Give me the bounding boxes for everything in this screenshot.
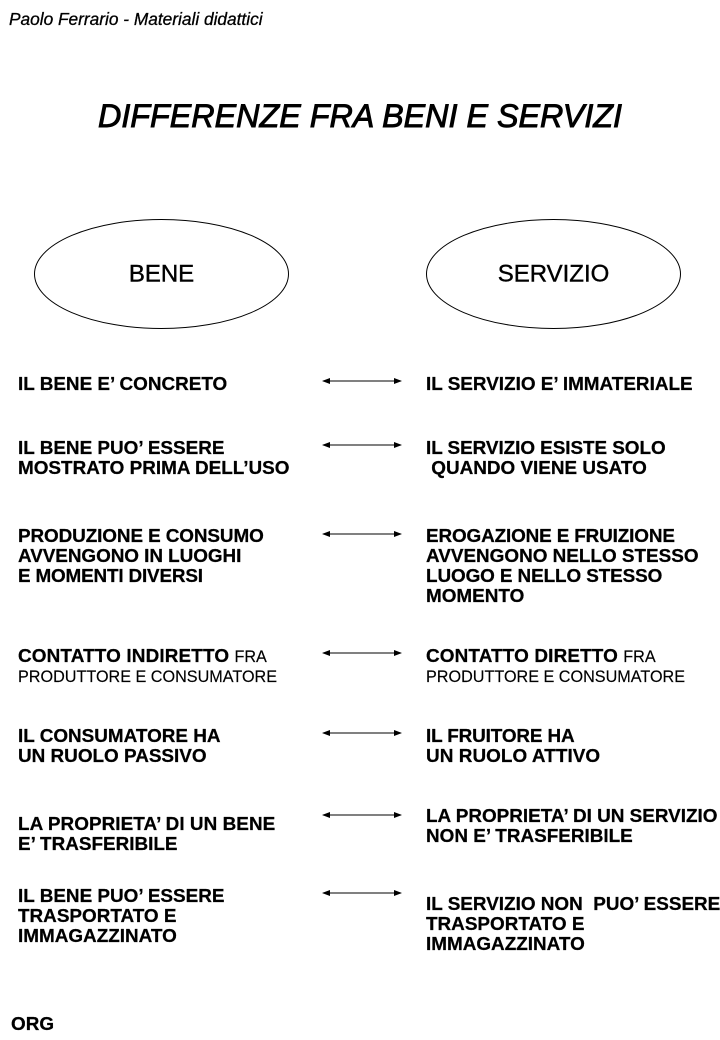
row 5 left: IL CONSUMATORE HA UN RUOLO PASSIVO (18, 726, 221, 767)
row 4 left: CONTATTO INDIRETTO FRA PRODUTTORE E CONSUMATORE (18, 646, 277, 686)
row 4 right: CONTATTO DIRETTO FRA PRODUTTORE E CONSUMATORE (426, 646, 685, 686)
header note: Paolo Ferrario - Materiali didattici (9, 9, 263, 29)
ellipse: servizio: SERVIZIO (498, 260, 609, 288)
row 3 right: EROGAZIONE E FRUIZIONE AVVENGONO NELLO STESSO LUOGO E NELLO STESSO MOMENTO (426, 526, 699, 607)
row 1 right: IL SERVIZIO E’ IMMATERIALE (426, 374, 693, 395)
arrow 1 (322, 378, 402, 384)
row 2 right: IL SERVIZIO ESISTE SOLO QUANDO VIENE USATO (426, 438, 666, 479)
arrow 7 (322, 890, 402, 896)
row 3 left: PRODUZIONE E CONSUMO AVVENGONO IN LUOGHI E MOMENTI DIVERSI (18, 526, 264, 587)
ellipse: servizio (426, 219, 681, 329)
row 6 left: LA PROPRIETA’ DI UN BENE E’ TRASFERIBILE (18, 814, 275, 855)
arrow 2 (322, 442, 402, 448)
arrow 3 (322, 531, 402, 537)
title: DIFFERENZE FRA BENI E SERVIZI (98, 98, 622, 134)
row 6 right: LA PROPRIETA’ DI UN SERVIZIO NON E’ TRASFERIBILE (426, 806, 717, 847)
row 7 right: IL SERVIZIO NON PUO’ ESSERE TRASPORTATO E IMMAGAZZINATO (426, 894, 720, 955)
arrow 4 (322, 650, 402, 656)
row 1 left: IL BENE E’ CONCRETO (18, 374, 227, 395)
row 7 left: IL BENE PUO’ ESSERE TRASPORTATO E IMMAGAZZINATO (18, 886, 224, 947)
arrow 6 (322, 812, 402, 818)
footer label: ORG (11, 1014, 54, 1035)
ellipse: bene (34, 219, 289, 329)
ellipse: bene: BENE (129, 260, 194, 288)
arrow 5 (322, 730, 402, 736)
row 2 left: IL BENE PUO’ ESSERE MOSTRATO PRIMA DELL’USO (18, 438, 289, 479)
row 5 right: IL FRUITORE HA UN RUOLO ATTIVO (426, 726, 600, 767)
